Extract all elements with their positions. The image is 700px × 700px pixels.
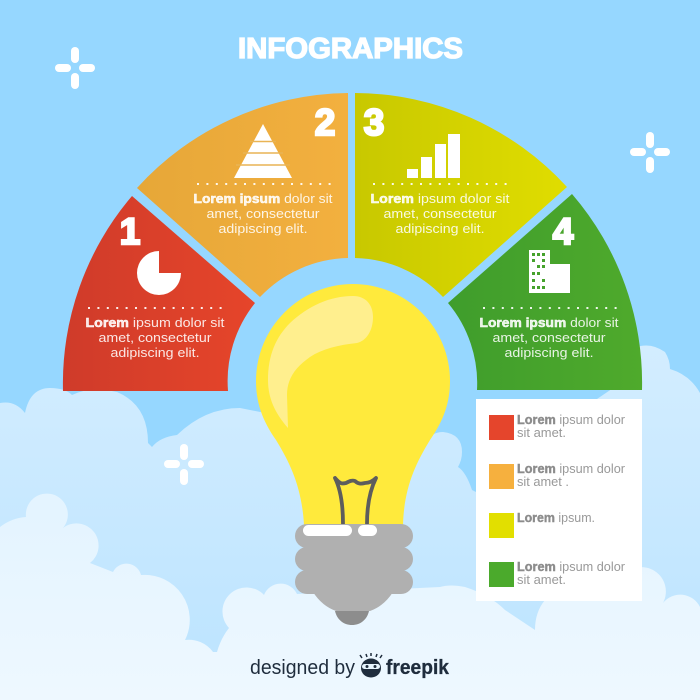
legend item green: Lorem ipsum dolor <box>517 560 624 574</box>
text block 1: adipiscing elit. <box>110 345 200 360</box>
title: INFOGRAPHICS <box>238 33 463 65</box>
bulb cap <box>335 611 369 625</box>
legend item yellow: Lorem ipsum. <box>517 511 595 525</box>
bulb highlight <box>268 296 373 428</box>
light bulb <box>256 284 450 625</box>
legend item orange: Lorem ipsum dolor <box>517 462 624 476</box>
legend item green: sit amet. <box>517 573 566 587</box>
legend item orange: sit amet . <box>517 475 569 489</box>
number 1: 1 <box>120 211 140 252</box>
number 2: 2 <box>315 102 335 143</box>
icon: sparkle on cloud <box>164 444 204 485</box>
footer credit <box>250 653 450 679</box>
bulb glass <box>256 284 450 525</box>
panel: legend <box>476 399 642 601</box>
legend item red: sit amet. <box>517 426 566 440</box>
icon: bar chart <box>407 134 460 178</box>
icon: pie chart <box>137 251 181 295</box>
text block 4: amet, consectetur <box>492 330 606 345</box>
legend item yellow <box>489 511 595 538</box>
number 3: 3 <box>364 102 384 143</box>
base highlights <box>303 525 377 536</box>
icon: sparkle top left <box>55 47 95 89</box>
footer credit: freepik <box>386 657 450 679</box>
front clouds <box>0 494 700 700</box>
filament <box>335 478 376 524</box>
text block 1: Lorem ipsum dolor sit <box>86 315 216 330</box>
back clouds <box>0 345 700 700</box>
legend item green <box>489 560 625 587</box>
number 4: 4 <box>553 211 574 252</box>
text block 4: adipiscing elit. <box>504 345 594 360</box>
panel: segment 4 green <box>448 194 642 390</box>
text block 2: amet, consectetur <box>206 206 320 221</box>
text block 2: adipiscing elit. <box>218 221 308 236</box>
text block 3: Lorem ipsum dolor sit <box>370 191 501 206</box>
text block 1: amet, consectetur <box>98 330 212 345</box>
footer credit: designed by <box>250 657 355 679</box>
legend item orange <box>489 462 625 489</box>
bulb base <box>295 524 413 611</box>
icon: sparkle top right <box>630 132 670 173</box>
legend item red: Lorem ipsum dolor <box>517 413 624 427</box>
text block 4: Lorem ipsum dolor sit <box>480 315 615 330</box>
text block 2: Lorem ipsum dolor sit <box>194 191 329 206</box>
icon: buildings <box>529 250 570 293</box>
legend item red <box>489 413 625 440</box>
panel: segment 2 orange <box>137 93 348 297</box>
text block 3: amet, consectetur <box>384 206 497 221</box>
icon: pyramid <box>234 124 292 178</box>
panel: segment 3 yellow-green <box>355 93 567 297</box>
text block 3: adipiscing elit. <box>396 221 484 236</box>
icon: freepik logo <box>360 653 382 678</box>
panel: segment 1 red <box>63 196 255 391</box>
